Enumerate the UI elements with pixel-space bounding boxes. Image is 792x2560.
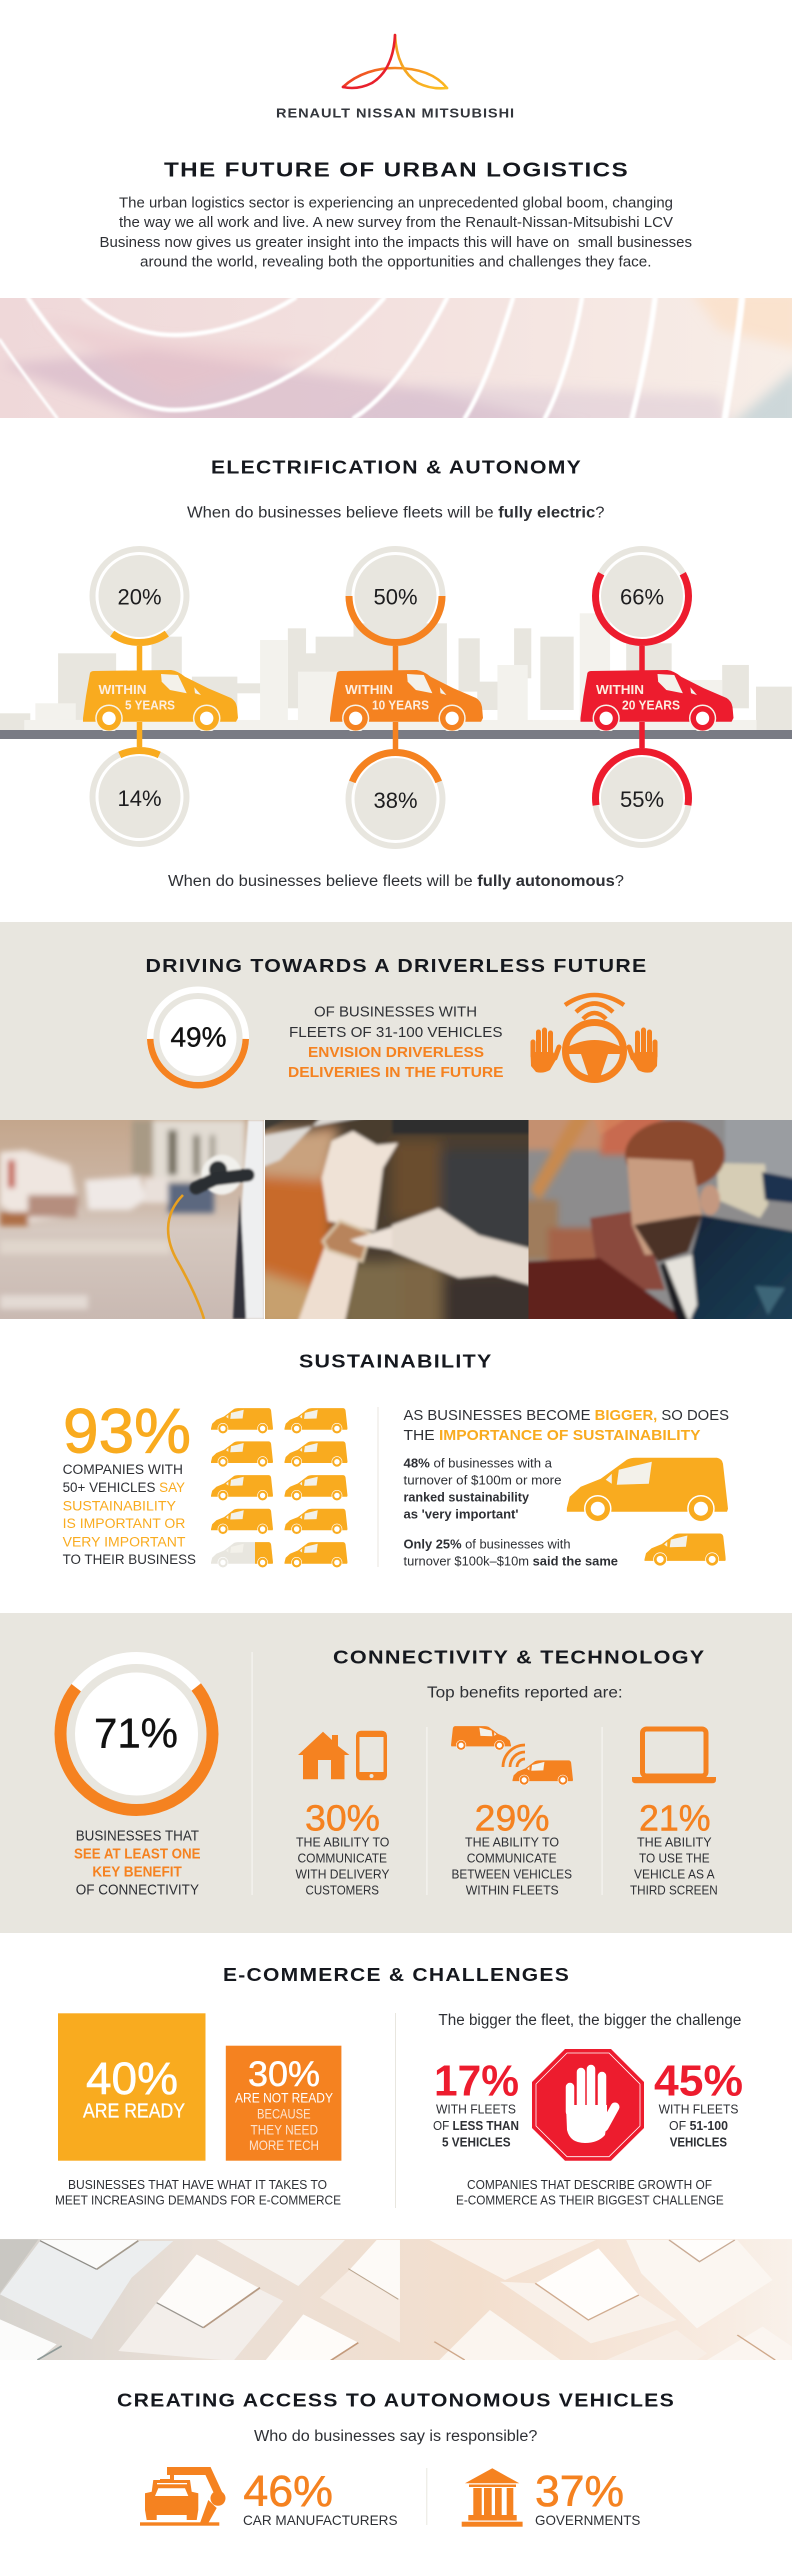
question: fully electric: When do businesses believe fleets will be fully electric ? [187,504,605,522]
heading: electrification: ELECTRIFICATION & AUTONOMY [211,456,582,478]
text: 48% of businesses: as 'very important' [404,1506,518,1521]
ring 71%: 71% [94,1709,178,1756]
caption: left: MEET INCREASING DEMANDS FOR E-COMMERCE [55,2193,341,2208]
top ring 20%: 20% [117,584,162,610]
stat: 45% [654,2056,743,2150]
stat: 93% companies: IS IMPORTANT OR [63,1516,186,1531]
text: bigger businesses: THE IMPORTANCE OF SUSTAINABILITY [404,1428,701,1444]
stat: 93% companies: VERY IMPORTANT [63,1534,185,1549]
stat: 30%: 30% [305,1798,380,1839]
stat: 30%: COMMUNICATE [298,1852,387,1866]
van label: WITHIN [345,683,393,697]
caption: left: BUSINESSES THAT HAVE WHAT IT TAKES TO [68,2177,327,2192]
brand name: RENAULT NISSAN MITSUBISHI [276,106,515,120]
icon array: ten vans [211,1408,348,1568]
box: 30% not ready [226,2046,341,2161]
stat: 46%: 46% [243,2467,333,2516]
stat: 93% companies: TO THEIR BUSINESS [63,1552,196,1567]
stat: 17%: OF LESS THAN [433,2119,519,2133]
icon: steering wheel with wifi and raised hands [530,995,658,1080]
stat: 17%: 5 VEHICLES [442,2136,511,2150]
box: 30% not ready: 30% [248,2055,320,2094]
intro text: around the world, revealing both the opportunities and challenges they face. [140,254,652,270]
van label [345,683,429,712]
text: 71% description: BUSINESSES THAT [76,1828,199,1844]
text: 48% of businesses: turnover of $100m or more [404,1473,562,1488]
column: within 5 years [83,549,238,844]
bottom ring 14%: 14% [117,786,162,811]
intro text: Business now gives us greater insight into the impacts this will have on small businesses [100,234,692,251]
text: 48% of businesses [404,1456,562,1521]
stat: 29%: THE ABILITY TO [465,1836,559,1850]
text: bigger businesses [404,1408,729,1444]
driverless text: DELIVERIES IN THE FUTURE [288,1065,504,1081]
connector [393,646,398,750]
top ring 66% [595,549,689,643]
stat: 93% companies [63,1397,196,1567]
text: 71% description: KEY BENEFIT [92,1865,182,1881]
panel: driverless future [0,922,792,1120]
stat: 29% [452,1798,572,1898]
stat: 29%: 29% [475,1798,550,1839]
heading: CONNECTIVITY & TECHNOLOGY [333,1646,706,1667]
van: yellow [83,670,238,732]
van label: 5 YEARS [125,698,175,712]
bottom ring 55%: 55% [620,787,664,812]
stat: 93% companies: SUSTAINABILITY [63,1498,176,1513]
caption: right: COMPANIES THAT DESCRIBE GROWTH OF [467,2177,712,2192]
van label: 10 YEARS [372,698,429,712]
stat: 46%: CAR MANUFACTURERS [243,2512,398,2528]
van label: WITHIN [98,683,146,697]
panel: connectivity [0,1613,792,1933]
road [0,730,792,739]
title: THE FUTURE OF URBAN LOGISTICS [164,160,629,182]
ring 49% [150,990,246,1085]
top ring 20% [92,549,186,643]
heading: e-commerce: E-COMMERCE & CHALLENGES [223,1964,570,1985]
stat: 45%: 45% [654,2056,743,2105]
stat: 46% [243,2467,398,2528]
stat: 17% [433,2056,519,2150]
text: only 25%: Only 25% of businesses with [404,1537,570,1552]
van label: 20 YEARS [622,698,680,712]
connector [639,646,645,750]
caption: right [456,2177,724,2208]
stat: 29%: BETWEEN VEHICLES [452,1868,572,1882]
photo: EV charging on street [0,1120,264,1319]
bottom ring 55% [595,751,689,845]
stat: 21%: THIRD SCREEN [630,1884,718,1898]
intro text: the way we all work and live. A new survey from the Renault-Nissan-Mitsubishi LCV [119,214,673,231]
banner: pink abstract curves [0,298,792,418]
van: orange [330,670,483,732]
driverless text: FLEETS OF 31-100 VEHICLES [289,1025,503,1041]
icon: big van [567,1458,728,1522]
stat: 93% companies: 93% [63,1397,191,1467]
text: 71% description: SEE AT LEAST ONE [74,1846,201,1862]
intro text: The urban logistics sector is experiencing an unprecedented global boom, changing [119,194,673,212]
driverless text: OF BUSINESSES WITH [314,1005,477,1021]
top ring 66%: 66% [620,584,664,610]
photo: man in vehicle [528,1120,792,1319]
caption: left [55,2177,341,2208]
text: 71% description: OF CONNECTIVITY [76,1882,199,1898]
text: 71% description [74,1828,201,1898]
photo: smartwatch in car [265,1120,528,1319]
driverless text: ENVISION DRIVERLESS [308,1045,484,1061]
stat: 21%: THE ABILITY [637,1836,712,1850]
logo: alliance emblem [343,35,447,88]
stat: 29%: WITHIN FLEETS [466,1884,559,1898]
van label [98,683,175,712]
stat: 29%: COMMUNICATE [467,1852,557,1866]
stat: 21%: VEHICLE AS A [634,1868,715,1882]
stat: 45%: VEHICLES [670,2136,727,2150]
text: bigger businesses: AS BUSINESSES BECOME BIGGER, SO DOES [404,1408,729,1424]
text: only 25%: turnover $100k–$10m said the same [404,1554,618,1569]
icon: stop sign with hand [532,2049,644,2161]
subheading: Top benefits reported are: [427,1684,623,1701]
column: within 20 years [580,549,734,845]
stat: 17%: 17% [434,2056,519,2105]
text: only 25% [404,1537,618,1569]
box: 40% are ready: ARE READY [83,2101,185,2123]
stat: 37%: 37% [535,2467,624,2516]
stat: 21%: TO USE THE [639,1852,710,1866]
caption: right: E-COMMERCE AS THEIR BIGGEST CHALLENGE [456,2193,724,2208]
icon: small van [644,1534,726,1566]
box: 30% not ready: THEY NEED [250,2121,318,2137]
box: 30% not ready: BECAUSE [257,2105,311,2121]
van label [596,683,680,712]
stat: 37%: GOVERNMENTS [535,2512,640,2528]
connector [137,646,142,748]
box: 40% are ready [58,2013,206,2161]
question: responsible: Who do businesses say is responsible? [254,2428,538,2445]
ring 49%: 49% [170,1022,227,1053]
stat: 21% [630,1798,718,1898]
stat: 45%: OF 51-100 [669,2119,728,2133]
icon: robot arm and car [140,2471,226,2526]
question: fully autonomous: When do businesses believe fleets will be fully autonomous ? [168,873,624,890]
intro text [100,194,692,270]
box: 40% are ready: 40% [86,2053,178,2104]
stat: 93% companies: COMPANIES WITH [63,1462,183,1477]
driverless text [288,1005,504,1081]
stat: 21%: 21% [639,1798,711,1839]
bottom ring 38% [348,752,442,846]
van label: WITHIN [596,683,644,697]
city skyline [0,613,792,730]
van: red [580,670,734,732]
stat: 37% [535,2467,640,2528]
box: 30% not ready: ARE NOT READY [235,2089,334,2105]
top ring 50% [348,549,442,643]
column: within 10 years [330,549,483,846]
stat: 30% [296,1798,390,1898]
icon: vans communicating [451,1726,573,1785]
bottom ring 38%: 38% [373,788,418,813]
heading: autonomous access: CREATING ACCESS TO AUTONOMOUS VEHICLES [117,2390,675,2411]
subheading: fleet challenge: The bigger the fleet, the bigger the challenge [438,2012,741,2029]
banner: lattice roof [0,2239,792,2361]
stat: 93% companies: 50+ VEHICLES SAY [63,1480,185,1495]
icon: government building [462,2468,523,2527]
heading: DRIVING TOWARDS A DRIVERLESS FUTURE [146,955,648,976]
heading: sustainability: SUSTAINABILITY [299,1351,492,1372]
icon: laptop [632,1729,716,1783]
icon: house and phone [298,1731,387,1780]
ring 71% [60,1658,212,1810]
stat: 30%: WITH DELIVERY [296,1868,390,1882]
stat: 30%: CUSTOMERS [306,1884,379,1898]
bottom ring 14% [92,750,186,844]
stat: 45%: WITH FLEETS [659,2102,738,2116]
box: 30% not ready: MORE TECH [249,2137,319,2153]
stat: 17%: WITH FLEETS [436,2102,516,2116]
top ring 50%: 50% [373,584,418,610]
stat: 30%: THE ABILITY TO [296,1836,390,1850]
text: 48% of businesses: ranked sustainability [404,1490,530,1505]
text: 48% of businesses: 48% of businesses with a [404,1456,553,1471]
